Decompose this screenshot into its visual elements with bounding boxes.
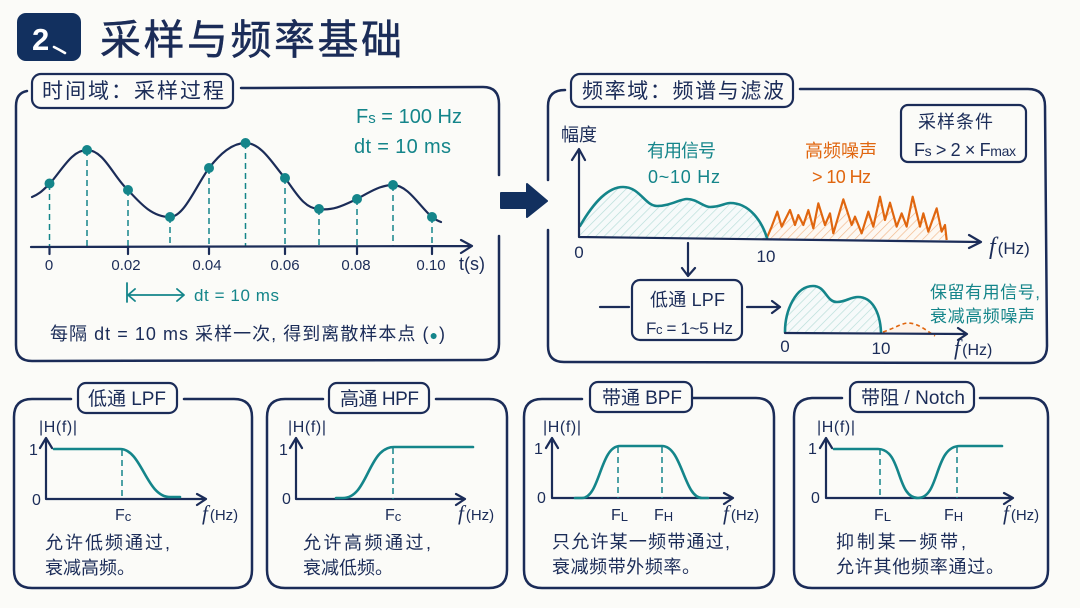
spectrum axes xyxy=(572,149,981,248)
panel heading: time domain: 时间域：采样过程 xyxy=(42,80,224,103)
heading: BPF xyxy=(590,382,692,412)
sampling parameters xyxy=(354,106,462,158)
description: 衰减频带外频率。 xyxy=(552,557,700,577)
axis labels xyxy=(808,441,1039,525)
sampling parameters: Fs = 100 Hz xyxy=(356,106,462,128)
axis labels: c xyxy=(125,509,132,524)
panel: notch filter xyxy=(794,382,1048,588)
panel: frequency domain xyxy=(548,74,1047,363)
description xyxy=(45,533,170,578)
time axis labels: 0.06 xyxy=(270,257,300,274)
axis labels: L xyxy=(884,509,891,524)
heading: BPF: 带通 BPF xyxy=(602,387,682,409)
filtered axis labels xyxy=(780,335,992,360)
LPF axes xyxy=(40,438,206,505)
panel: band-pass filter xyxy=(524,382,774,588)
y label: |H(f)| xyxy=(817,419,855,436)
time axis xyxy=(31,240,472,254)
panel: high-pass filter xyxy=(267,383,507,588)
axis labels: 0 xyxy=(537,490,546,507)
sampling condition box xyxy=(901,105,1026,162)
sampling condition box: 采样条件 xyxy=(918,112,993,132)
panel: time domain xyxy=(16,74,499,361)
spectrum: useful signal xyxy=(580,187,767,238)
description: 允许高频通过, xyxy=(303,533,431,553)
BPF curve xyxy=(575,446,708,498)
time axis labels: 0.02 xyxy=(111,257,141,274)
cutoff marker xyxy=(392,448,394,499)
panel heading: time domain xyxy=(32,74,233,108)
description xyxy=(836,532,1004,577)
filter box: Fc = 1~5 Hz xyxy=(646,319,733,338)
spectrum axis labels: 10 xyxy=(757,247,775,266)
axis labels xyxy=(534,441,759,525)
filtered axis labels: 0 xyxy=(780,337,790,356)
filter box xyxy=(632,280,742,340)
time axis labels xyxy=(45,254,485,274)
notch axes xyxy=(820,438,1013,504)
heading: HPF xyxy=(329,383,429,413)
axis labels: F xyxy=(115,507,125,524)
time axis labels: 0.08 xyxy=(341,257,371,274)
axis labels: 1 xyxy=(279,442,288,459)
axis labels: F xyxy=(385,507,395,524)
panel: low-pass filter xyxy=(14,383,252,588)
input line to filter xyxy=(600,306,629,308)
axis labels: L xyxy=(621,509,628,524)
axis labels: F xyxy=(654,507,664,524)
description: 衰减低频。 xyxy=(303,558,393,578)
description: 抑制某一频带, xyxy=(836,532,966,552)
axis labels: H xyxy=(664,509,673,524)
heading: notch: 带阻 / Notch xyxy=(861,387,965,409)
axis labels: c xyxy=(395,509,402,524)
axis labels: F xyxy=(874,507,884,524)
sampling parameters: dt = 10 ms xyxy=(354,136,451,158)
axis labels xyxy=(29,442,238,525)
noise label: 高频噪声 xyxy=(805,141,877,161)
axis labels: 1 xyxy=(534,441,543,458)
description xyxy=(303,533,431,578)
noise label: > 10 Hz xyxy=(812,167,871,187)
LPF curve xyxy=(54,449,180,497)
HPF curve xyxy=(336,447,473,498)
axis labels: f(Hz) xyxy=(723,501,759,525)
noise label xyxy=(805,141,877,187)
filter result note xyxy=(930,283,1040,326)
spectrum axis labels xyxy=(574,234,1030,266)
heading: LPF xyxy=(78,383,177,413)
arrow: time to frequency xyxy=(501,184,547,217)
useful signal label: 0~10 Hz xyxy=(648,167,720,187)
time axis labels: 0.10 xyxy=(416,257,446,274)
filtered spectrum axis xyxy=(785,328,967,340)
amplitude label: 幅度 xyxy=(561,125,597,145)
arrow: filter to result xyxy=(747,301,780,313)
dt interval arrow xyxy=(127,283,184,302)
useful signal label: 有用信号 xyxy=(647,141,716,161)
filtered spectrum xyxy=(785,286,935,336)
axis labels: 0 xyxy=(282,491,291,508)
axis labels: f(Hz) xyxy=(1003,501,1039,525)
axis labels: 0 xyxy=(32,492,41,509)
filter box: 低通 LPF xyxy=(650,290,725,310)
caption: 每隔 dt = 10 ms 采样一次, 得到离散样本点 (●) xyxy=(50,324,445,344)
axis labels: 0 xyxy=(811,490,820,507)
axis labels: 1 xyxy=(808,441,817,458)
axis labels: H xyxy=(954,509,963,524)
section number badge xyxy=(17,13,81,61)
description xyxy=(552,532,730,577)
band markers xyxy=(880,447,957,498)
y label: |H(f)| xyxy=(288,419,326,436)
band markers xyxy=(618,447,662,498)
heading: LPF: 低通 LPF xyxy=(88,388,166,410)
dt label: dt = 10 ms xyxy=(194,286,279,305)
spectrum axis labels: f(Hz) xyxy=(989,234,1030,260)
sample points xyxy=(44,138,437,222)
axis labels: f(Hz) xyxy=(458,501,494,525)
panel heading: frequency domain: 频率域：频谱与滤波 xyxy=(582,80,784,103)
axis labels: 1 xyxy=(29,442,38,459)
axis labels: F xyxy=(611,507,621,524)
time axis labels: 0.04 xyxy=(192,257,222,274)
notch curve xyxy=(834,446,1002,498)
filtered axis labels: 10 xyxy=(872,339,890,358)
time axis labels: 0 xyxy=(45,257,53,274)
heading: notch xyxy=(850,382,974,412)
BPF axes xyxy=(546,438,733,504)
filtered axis labels: f(Hz) xyxy=(954,335,992,360)
cutoff marker xyxy=(121,450,123,499)
axis labels xyxy=(279,442,494,525)
heading: HPF: 高通 HPF xyxy=(340,388,419,410)
useful signal label xyxy=(647,141,720,187)
description: 允许其他频率通过。 xyxy=(836,557,1004,577)
time axis labels: t(s) xyxy=(459,254,485,274)
panel heading: frequency domain xyxy=(571,74,793,107)
spectrum: noise xyxy=(767,197,947,240)
arrow: spectrum to filter xyxy=(682,243,695,276)
spectrum axis labels: 0 xyxy=(574,243,584,262)
filter result note: 衰减高频噪声 xyxy=(930,307,1035,326)
description: 只允许某一频带通过, xyxy=(552,532,730,552)
axis labels: f(Hz) xyxy=(202,501,238,525)
description: 衰减高频。 xyxy=(45,558,135,578)
title: 采样与频率基础 xyxy=(100,17,402,63)
sampling drop lines xyxy=(50,143,432,247)
sampling condition box: Fs > 2 × Fmax xyxy=(914,140,1016,160)
HPF axes xyxy=(290,438,465,505)
section number badge: 2 xyxy=(32,22,49,57)
axis labels: F xyxy=(944,507,954,524)
filter result note: 保留有用信号, xyxy=(930,283,1040,302)
y label: |H(f)| xyxy=(543,419,581,436)
description: 允许低频通过, xyxy=(45,533,170,553)
waveform curve xyxy=(32,143,441,222)
y label: |H(f)| xyxy=(39,419,77,436)
